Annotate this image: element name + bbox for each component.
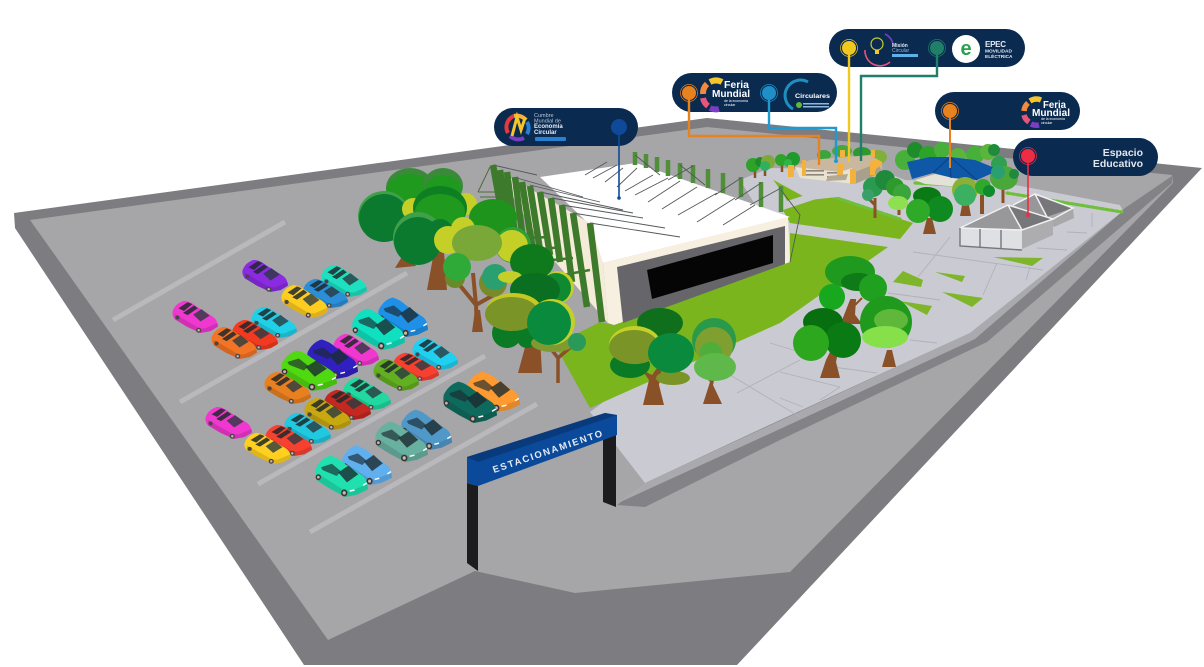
car: orange large [467,372,520,412]
car: dark green large [443,382,497,423]
connector: blue [760,84,838,163]
trees behind pavilion [895,142,1007,172]
connector: yellow [840,40,858,162]
marker [1020,148,1036,217]
car: sky blue [342,446,392,485]
car: cyan lower [284,413,331,444]
EPEC logo: MOVILIDAD [985,48,1012,54]
logo text: de la economía [1041,117,1065,121]
car: red lower [265,425,312,456]
parking entrance sign [467,413,617,571]
car: mustard [304,398,351,430]
education building [960,194,1074,250]
car: steel blue [401,410,452,450]
logo text [892,43,910,54]
tree: large left [793,308,861,378]
logo text: Mundial de [534,118,561,124]
facade opening [647,235,773,299]
car: teal [321,265,367,297]
callout: Feria Mundial and Circulares [672,73,837,112]
tree: yellow-green [434,217,531,332]
tree: far left [358,168,463,268]
car: sage [375,422,428,462]
main building [478,152,800,325]
facade frame [603,217,790,325]
connector: green [861,40,946,161]
car: red [232,320,278,350]
sign label: ESTACIONAMIENTO [491,429,604,476]
car: orange [211,327,257,359]
callout: Espacio Educativo [1013,138,1158,217]
logo text: Mundial [712,88,750,100]
car: teal lower [315,456,368,497]
hedges [828,183,1122,219]
logo text: Misión [892,43,908,49]
side braces [478,167,590,275]
car: orange middle [264,372,311,404]
tree: slim [527,299,586,383]
tree: dark back [469,199,517,237]
logo text: de la economía [724,99,748,103]
plaza grass patches [893,257,1043,315]
EPEC logo: ELÉCTRICA [985,52,1013,60]
car: purple [242,260,288,292]
car: magenta lower [205,407,252,439]
EPEC logo: e [960,38,972,60]
logo text: Feria [724,79,749,91]
logo text [1032,100,1070,125]
callout: Misión Circular and EPEC [829,29,1025,67]
EPEC logo [952,35,1013,63]
tree: mid dark [485,244,574,373]
trees: right of lawn [862,165,1019,234]
building: fair pavilion [770,150,900,200]
tree: right bright [860,296,912,367]
callout: Feria Mundial [935,92,1080,168]
callout: Cumbre Mundial [494,108,638,200]
car: green teal [343,378,391,410]
rear cables [635,155,800,262]
marker [942,102,958,168]
logo text: Cumbre [534,113,554,119]
car: cyan right [412,338,458,370]
connector: orange [680,84,819,165]
car: magenta middle [333,334,379,366]
logo text: Circular [534,130,557,136]
back trees behind fair building [746,145,887,178]
logo ring [506,116,529,139]
logo text: Mundial [1032,108,1070,119]
logo ring [703,81,722,109]
car: olive [373,359,419,391]
logo text: Feria [1043,100,1066,111]
car: dark red [324,390,371,420]
car: blue [303,279,348,308]
rear columns [635,152,781,212]
trees: lower plaza [793,256,912,378]
Circulares logo: Circulares [795,93,830,100]
car: teal large [352,309,405,350]
logo text [712,79,750,107]
parked cars [172,260,520,497]
car: yellow lower [244,433,291,464]
label: Educativo [1093,158,1143,170]
logo ring [1024,99,1041,125]
roof ribs [493,162,755,237]
logo text: circular [1041,121,1053,125]
marker [611,119,627,200]
car: navy large [307,340,358,379]
left side wall [497,170,608,323]
plaza curb [616,176,1172,507]
EPEC logo: EPEC [985,40,1006,49]
car: cyan [251,307,297,338]
label: Espacio [1103,147,1143,159]
car: green large [281,351,337,391]
ground: parking and road surface [30,127,1173,640]
car: coral [393,353,439,381]
left post [467,483,478,571]
trees: left of main building [358,168,586,383]
Circulares logo [785,80,830,109]
facade recess [617,226,785,323]
right post [603,435,616,507]
trees: front of main building [609,308,736,405]
tree: round [692,318,736,404]
logo text: Economía [534,124,563,130]
car: blue large [378,298,428,337]
beam [467,413,617,486]
tree: top [819,256,887,323]
tree: olive cluster [609,308,694,405]
logo text: Circular [892,48,910,54]
blue pavilion dome [907,157,995,187]
roof [540,163,790,263]
bulb logo [865,34,893,66]
plaza paving [590,168,1123,483]
parking lines [113,222,537,532]
logo text: circular [724,103,736,107]
car: yellow [281,285,328,318]
tree: tall [393,186,477,290]
side columns [493,165,602,322]
logo text [534,113,563,136]
car: magenta [172,301,218,333]
lawns [555,178,913,408]
